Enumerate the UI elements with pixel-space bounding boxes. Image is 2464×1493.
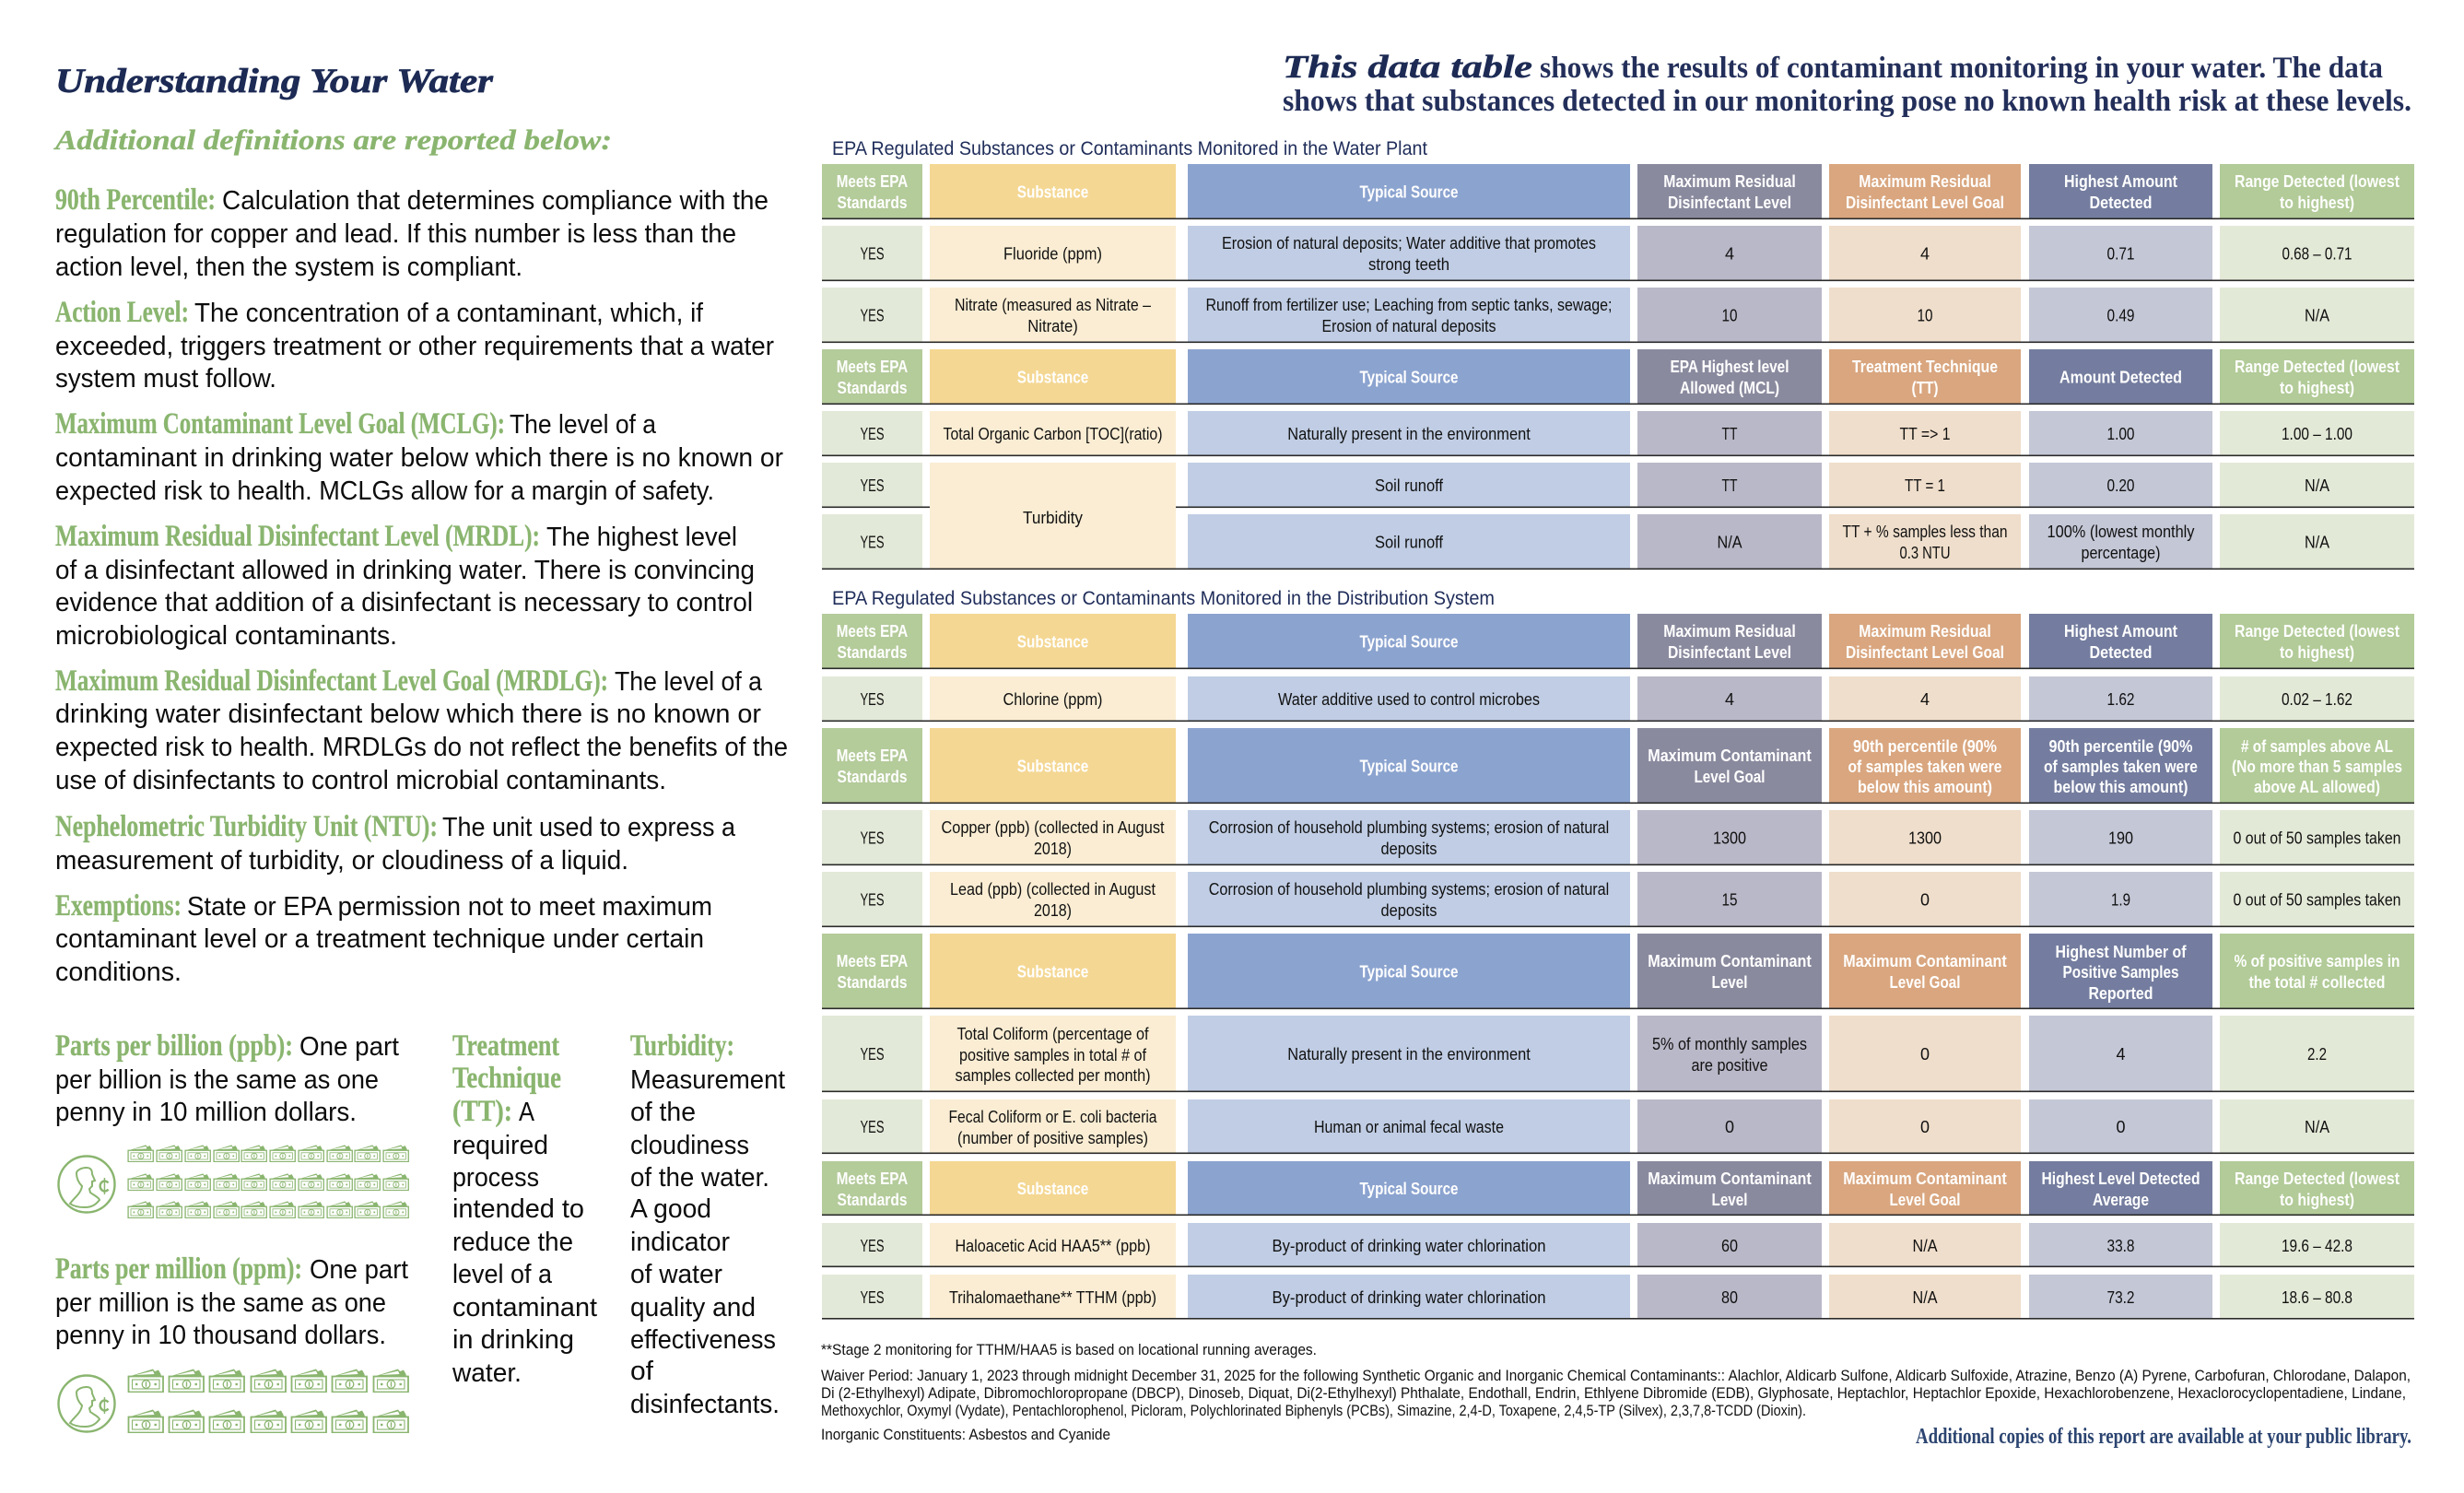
definition: Turbidity: of the: [630, 1098, 696, 1127]
header row: residual disinfectant: to highest): [2280, 194, 2354, 212]
header row: coliform: Level: [1712, 973, 1747, 992]
definition: Turbidity: effectiveness: [630, 1325, 776, 1355]
row: haloacetic acid: 33.8: [2106, 1237, 2134, 1255]
header row: 90th percentile: 90th percentile (90%: [1853, 737, 1997, 756]
row: nitrate: 10: [1721, 306, 1738, 324]
row: chlorine: 4: [1920, 690, 1930, 709]
header row: treatment technique: (TT): [1911, 379, 1939, 397]
definition: NTU: The unit used to express a: [442, 813, 735, 842]
icon: rows of dollar bills (ppb): [127, 1145, 408, 1218]
definition: Treatment Technique: Technique: [452, 1062, 561, 1095]
row: haloacetic acid: YES: [861, 1237, 885, 1255]
row: fluoride: 4: [1920, 245, 1930, 264]
row: turbidity (two rows with merged substance cell): TT: [1721, 476, 1738, 495]
definition: MCLG: Maximum Contaminant Level Goal (MCLG):: [55, 407, 505, 441]
header row: disinfection by-products: Level: [1712, 1191, 1747, 1209]
row: chlorine: Water additive used to control microbes: [1278, 690, 1540, 709]
row: turbidity (two rows with merged substance cell): Soil runoff: [1375, 533, 1444, 551]
header row: disinfection by-products: Maximum Contaminant: [1843, 1170, 2007, 1188]
definition: MRDLG: The level of a: [615, 667, 762, 697]
row: total coliform: are positive: [1692, 1056, 1767, 1075]
definition: Exemptions: Exemptions:: [55, 889, 182, 923]
row: nitrate: YES: [861, 306, 885, 324]
row: fecal coliform: [822, 1099, 2414, 1154]
definition: MCLG: The level of a: [510, 410, 656, 440]
header row: coliform: Level Goal: [1889, 973, 1961, 992]
definition: NTU: [55, 810, 735, 876]
row: turbidity (two rows with merged substance cell): percentage): [2081, 544, 2160, 562]
definition: 90th Percentile: [55, 183, 769, 282]
header row: residual disinfectant: Range Detected (lowest: [2235, 622, 2399, 641]
definition: Parts per million: penny in 10 thousand dollars.: [55, 1321, 386, 1350]
row: total organic carbon: [822, 411, 2414, 456]
heading: this data table intro: shows that substances detected in our monitoring pose no known health risk at these levels.: [1283, 85, 2411, 118]
header row: 90th percentile: Standards: [837, 768, 907, 786]
section heading: water plant: EPA Regulated Substances or Contaminants Monitored in the Water Plant: [832, 138, 1427, 159]
row: copper: 2018): [1034, 840, 1072, 858]
row: total organic carbon: YES: [861, 425, 885, 443]
row: nitrate: 10: [1917, 306, 1933, 324]
definition: Parts per billion: per billion is the same as one: [55, 1065, 379, 1095]
header row: residual disinfectant: Detected: [2090, 194, 2153, 212]
row: fluoride: 0.71: [2106, 245, 2134, 264]
row: trihalomethane: YES: [861, 1288, 885, 1307]
definition: Treatment Technique: level of a: [452, 1260, 552, 1289]
header row: residual disinfectant: Standards: [837, 194, 907, 212]
header row: disinfection by-products: Typical Source: [1360, 1180, 1458, 1198]
icon: penny coin (ppb): [59, 1156, 114, 1213]
definition: Treatment Technique: intended to: [452, 1194, 584, 1224]
header row: residual disinfectant: Detected: [2090, 643, 2153, 662]
icon: rows of dollar bills (ppm): [127, 1370, 408, 1432]
title: Understanding Your Water: [55, 63, 494, 100]
heading: this data table intro: [1283, 49, 2411, 118]
definition: Treatment Technique: required: [452, 1131, 548, 1160]
header row: disinfection by-products: to highest): [2280, 1191, 2354, 1209]
header row: coliform: Highest Number of: [2055, 943, 2187, 961]
row: fecal coliform: YES: [861, 1118, 885, 1136]
definition: Treatment Technique: A: [519, 1098, 534, 1127]
definition: Treatment Technique: [452, 1029, 597, 1388]
row: total coliform: samples collected per month): [955, 1066, 1150, 1085]
definition: Parts per million: [55, 1252, 408, 1350]
header row: treatment technique: Meets EPA: [837, 358, 908, 376]
definition: Turbidity: quality and: [630, 1293, 756, 1323]
header row: 90th percentile: below this amount): [1858, 778, 1992, 796]
header row: disinfection by-products: Maximum Contaminant: [1648, 1170, 1812, 1188]
definition: Treatment Technique: (TT):: [452, 1095, 512, 1128]
row: nitrate: N/A: [2305, 306, 2329, 324]
row: trihalomethane: [822, 1275, 2414, 1320]
icon: penny coin (ppm): [59, 1375, 114, 1432]
header row: 90th percentile: of samples taken were: [2044, 758, 2198, 776]
definition: Turbidity: indicator: [630, 1228, 730, 1257]
definition: Exemptions: [55, 889, 712, 987]
row: fecal coliform: Fecal Coliform or E. coli bacteria: [949, 1108, 1157, 1126]
definition: Parts per billion: Parts per billion (ppb):: [55, 1029, 293, 1063]
definition: Treatment Technique: reduce the: [452, 1228, 573, 1257]
row: fluoride: 4: [1725, 245, 1734, 264]
row: total coliform: 5% of monthly samples: [1652, 1035, 1807, 1053]
row: turbidity (two rows with merged substance cell): YES: [861, 533, 885, 551]
header row: coliform: Positive Samples: [2062, 963, 2178, 982]
row: fluoride: 0.68 – 0.71: [2282, 245, 2352, 264]
definition: Parts per billion: penny in 10 million dollars.: [55, 1098, 357, 1127]
header row: coliform: [822, 934, 2414, 1009]
row: haloacetic acid: 19.6 – 42.8: [2282, 1237, 2353, 1255]
row: lead: 15: [1721, 890, 1738, 909]
row: chlorine: 0.02 – 1.62: [2282, 690, 2353, 709]
definition: Parts per million: Parts per million (ppm):: [55, 1252, 302, 1286]
row: turbidity (two rows with merged substance cell): 100% (lowest monthly: [2047, 523, 2195, 541]
definition: MRDL: Maximum Residual Disinfectant Level (MRDL):: [55, 520, 540, 553]
definition: 90th Percentile: action level, then the system is compliant.: [55, 253, 522, 282]
header row: residual disinfectant: Meets EPA: [837, 622, 908, 641]
definition: MRDLG: use of disinfectants to control microbial contaminants.: [55, 766, 666, 795]
row: trihalomethane: 18.6 – 80.8: [2282, 1288, 2353, 1307]
header row: residual disinfectant: Meets EPA: [837, 172, 908, 191]
row: haloacetic acid: [822, 1223, 2414, 1267]
row: nitrate: Erosion of natural deposits: [1321, 317, 1496, 335]
row: trihalomethane: 73.2: [2106, 1288, 2134, 1307]
header row: treatment technique: [822, 349, 2414, 405]
definition: MRDL: of a disinfectant allowed in drinking water. There is convincing: [55, 556, 755, 585]
header row: coliform: Meets EPA: [837, 952, 908, 970]
row: fecal coliform: 0: [1920, 1118, 1930, 1136]
header row: treatment technique: Treatment Technique: [1852, 358, 1998, 376]
definition: Treatment Technique: water.: [452, 1358, 522, 1388]
row: turbidity (two rows with merged substance cell): 0.20: [2106, 476, 2134, 495]
header row: 90th percentile: of samples taken were: [1848, 758, 2001, 776]
header row: residual disinfectant: Maximum Residual: [1663, 622, 1796, 641]
definition: Parts per million: per million is the same as one: [55, 1288, 386, 1318]
footnote: waiver period: Methoxychlor, Oxymyl (Vydate), Pentachlorophenol, Picloram, Polychlorinated Biphenyls (PCBs), Simazine, 2,4-D, Toxapene, 2,4,5-TP (Silvex), 2,3,7,8-TCDD (Dioxin).: [821, 1403, 1806, 1419]
row: chlorine: 4: [1725, 690, 1734, 709]
row: total coliform: 0: [1920, 1045, 1930, 1064]
row: trihalomethane: By-product of drinking water chlorination: [1272, 1288, 1546, 1307]
header row: residual disinfectant: Maximum Residual: [1663, 172, 1796, 191]
header row: treatment technique: EPA Highest level: [1670, 358, 1789, 376]
header row: disinfection by-products: Range Detected (lowest: [2235, 1170, 2399, 1188]
row: lead: deposits: [1380, 901, 1437, 920]
footnote: waiver period: [821, 1368, 2411, 1419]
header row: coliform: the total # collected: [2248, 973, 2385, 992]
row: lead: 0 out of 50 samples taken: [2234, 890, 2401, 909]
definition: Exemptions: State or EPA permission not to meet maximum: [187, 892, 712, 922]
header row: 90th percentile: 90th percentile (90%: [2049, 737, 2193, 756]
row: total organic carbon: TT: [1721, 425, 1738, 443]
header row: 90th percentile: below this amount): [2053, 778, 2188, 796]
definition: MRDLG: [55, 664, 788, 795]
header row: 90th percentile: Substance: [1017, 758, 1088, 776]
header row: 90th percentile: [822, 728, 2414, 804]
row: total organic carbon: 1.00: [2106, 425, 2134, 443]
definition: Action Level: system must follow.: [55, 364, 276, 394]
definition: Treatment Technique: process: [452, 1163, 539, 1193]
header row: coliform: Substance: [1017, 962, 1088, 981]
header row: disinfection by-products: Highest Level Detected: [2042, 1170, 2200, 1188]
header row: residual disinfectant: Typical Source: [1360, 182, 1458, 201]
header row: coliform: Reported: [2088, 984, 2153, 1003]
row: copper: YES: [861, 829, 885, 848]
header row: residual disinfectant: Standards: [837, 643, 907, 662]
definition: MCLG: expected risk to health. MCLGs allow for a margin of safety.: [55, 476, 714, 506]
header row: 90th percentile: # of samples above AL: [2241, 737, 2393, 756]
header row: residual disinfectant: Substance: [1017, 632, 1088, 651]
definition: Turbidity: cloudiness: [630, 1131, 749, 1160]
header row: disinfection by-products: Standards: [837, 1191, 907, 1209]
row: lead: [822, 872, 2414, 927]
footnote: stage 2 monitoring: **Stage 2 monitoring for TTHM/HAA5 is based on locational running averages.: [821, 1342, 1317, 1358]
row: nitrate: [822, 288, 2414, 343]
definition: MRDL: evidence that addition of a disinfectant is necessary to control: [55, 588, 753, 617]
definition: Parts per billion: [55, 1029, 399, 1127]
section heading: distribution system: EPA Regulated Substances or Contaminants Monitored in the Distribution System: [832, 588, 1495, 609]
row: turbidity (two rows with merged substance cell): N/A: [1718, 533, 1742, 551]
definition: Turbidity: A good: [630, 1194, 711, 1224]
row: fluoride: Fluoride (ppm): [1003, 245, 1102, 264]
row: copper: 190: [2108, 829, 2133, 848]
panel: definitions: [53, 63, 788, 1432]
row: nitrate: Runoff from fertilizer use; Leaching from septic tanks, sewage;: [1205, 296, 1613, 314]
header row: residual disinfectant: [822, 614, 2414, 669]
definition: Action Level: The concentration of a contaminant, which, if: [194, 299, 703, 328]
header row: disinfection by-products: Meets EPA: [837, 1170, 908, 1188]
row: total coliform: 4: [2116, 1045, 2126, 1064]
row: total organic carbon: Total Organic Carbon [TOC](ratio): [944, 425, 1163, 443]
row: nitrate: 0.49: [2106, 306, 2134, 324]
row: haloacetic acid: 60: [1721, 1237, 1738, 1255]
definition: MRDL: The highest level: [546, 523, 737, 552]
row: trihalomethane: Trihalomaethane** TTHM (ppb): [949, 1288, 1156, 1307]
header row: treatment technique: Substance: [1017, 369, 1088, 387]
header row: residual disinfectant: Disinfectant Level: [1668, 194, 1791, 212]
definition: MCLG: contaminant in drinking water below which there is no known or: [55, 443, 783, 473]
definition: NTU: measurement of turbidity, or cloudiness of a liquid.: [55, 846, 628, 876]
header row: coliform: % of positive samples in: [2234, 952, 2399, 970]
header row: coliform: Standards: [837, 973, 907, 992]
row: turbidity (two rows with merged substance cell): Turbidity: [1023, 509, 1083, 527]
row: fluoride: YES: [861, 245, 885, 264]
header row: treatment technique: Amount Detected: [2059, 369, 2182, 387]
header row: residual disinfectant: Highest Amount: [2064, 622, 2177, 641]
definition: Turbidity: [630, 1029, 785, 1419]
row: fluoride: [822, 226, 2414, 281]
definition: Turbidity: Turbidity:: [630, 1029, 734, 1063]
row: turbidity (two rows with merged substance cell): N/A: [2305, 533, 2329, 551]
row: copper: 0 out of 50 samples taken: [2234, 829, 2401, 848]
row: lead: 0: [1920, 890, 1930, 909]
row: total coliform: Total Coliform (percentage of: [956, 1025, 1149, 1043]
definition: Turbidity: Measurement: [630, 1065, 785, 1095]
footnote: inorganic constituents: Inorganic Constituents: Asbestos and Cyanide: [821, 1427, 1110, 1443]
definition: Action Level: [55, 296, 774, 394]
row: haloacetic acid: By-product of drinking water chlorination: [1272, 1237, 1546, 1255]
definition: MRDLG: expected risk to health. MRDLGs do not reflect the benefits of the: [55, 733, 788, 762]
header row: 90th percentile: (No more than 5 samples: [2232, 758, 2402, 776]
header row: coliform: Maximum Contaminant: [1648, 952, 1812, 970]
row: trihalomethane: 80: [1721, 1288, 1738, 1307]
header row: residual disinfectant: Maximum Residual: [1859, 622, 1991, 641]
row: lead: Lead (ppb) (collected in August: [950, 880, 1156, 899]
header row: 90th percentile: above AL allowed): [2254, 778, 2380, 796]
definition: MRDL: microbiological contaminants.: [55, 621, 397, 651]
row: turbidity (two rows with merged substance cell): YES: [861, 476, 885, 495]
header row: disinfection by-products: [822, 1161, 2414, 1216]
header row: residual disinfectant: Typical Source: [1360, 632, 1458, 651]
row: total coliform: 2.2: [2307, 1045, 2327, 1064]
header row: disinfection by-products: Substance: [1017, 1180, 1088, 1198]
definition: MRDLG: drinking water disinfectant below which there is no known or: [55, 699, 762, 729]
row: turbidity (two rows with merged substance cell): 0.3 NTU: [1900, 544, 1950, 562]
row: copper: 1300: [1713, 829, 1746, 848]
definition: MCLG: [55, 407, 783, 506]
header row: 90th percentile: Level Goal: [1694, 768, 1766, 786]
header row: disinfection by-products: Average: [2093, 1191, 2149, 1209]
header row: residual disinfectant: to highest): [2280, 643, 2354, 662]
row: turbidity (two rows with merged substance cell): [822, 463, 2414, 570]
header row: treatment technique: Typical Source: [1360, 369, 1458, 387]
definition: Treatment Technique: in drinking: [452, 1325, 574, 1355]
header row: residual disinfectant: Disinfectant Level Goal: [1846, 643, 2004, 662]
header row: 90th percentile: Typical Source: [1360, 758, 1458, 776]
row: fecal coliform: N/A: [2305, 1118, 2329, 1136]
row: total coliform: Naturally present in the environment: [1287, 1045, 1531, 1064]
header row: residual disinfectant: Maximum Residual: [1859, 172, 1991, 191]
header row: residual disinfectant: Disinfectant Level Goal: [1846, 194, 2004, 212]
row: fecal coliform: (number of positive samples): [957, 1129, 1148, 1147]
header row: 90th percentile: Meets EPA: [837, 746, 908, 765]
definition: Treatment Technique: Treatment: [452, 1029, 559, 1063]
definition: Turbidity: of: [630, 1357, 653, 1386]
definition: Treatment Technique: contaminant: [452, 1293, 597, 1323]
row: total organic carbon: TT => 1: [1900, 425, 1950, 443]
header row: treatment technique: Allowed (MCL): [1680, 379, 1779, 397]
row: fecal coliform: 0: [1725, 1118, 1734, 1136]
header row: coliform: Typical Source: [1360, 962, 1458, 981]
header row: coliform: Maximum Contaminant: [1843, 952, 2007, 970]
definition: Parts per million: One part: [310, 1255, 408, 1285]
definition: 90th Percentile: Calculation that determines compliance with the: [222, 186, 769, 216]
definition: Exemptions: contaminant level or a treatment technique under certain: [55, 924, 704, 954]
definition: Action Level: Action Level:: [55, 296, 189, 329]
header row: treatment technique: Standards: [837, 379, 907, 397]
row: nitrate: Nitrate): [1027, 317, 1078, 335]
row: copper: Corrosion of household plumbing systems; erosion of natural: [1209, 818, 1609, 837]
subtitle: Additional definitions are reported below:: [53, 123, 612, 156]
row: chlorine: Chlorine (ppm): [1003, 690, 1102, 709]
header row: residual disinfectant: Highest Amount: [2064, 172, 2177, 191]
row: trihalomethane: N/A: [1913, 1288, 1937, 1307]
row: fecal coliform: Human or animal fecal waste: [1314, 1118, 1504, 1136]
table: water plant: [822, 164, 2414, 570]
row: total organic carbon: Naturally present in the environment: [1287, 425, 1531, 443]
row: copper: [822, 810, 2414, 865]
header row: residual disinfectant: [822, 164, 2414, 219]
definition: MRDLG: Maximum Residual Disinfectant Level Goal (MRDLG):: [55, 664, 608, 698]
row: total coliform: [822, 1016, 2414, 1092]
definition: Parts per billion: One part: [299, 1032, 399, 1062]
row: lead: YES: [861, 890, 885, 909]
header row: treatment technique: Range Detected (lowest: [2235, 358, 2399, 376]
definition: NTU: Nephelometric Turbidity Unit (NTU):: [55, 810, 438, 843]
header row: 90th percentile: Maximum Contaminant: [1648, 746, 1812, 765]
definition: Turbidity: of water: [630, 1260, 722, 1289]
definition: Action Level: exceeded, triggers treatment or other requirements that a water: [55, 332, 774, 361]
row: total organic carbon: 1.00 – 1.00: [2282, 425, 2353, 443]
row: lead: 2018): [1034, 901, 1072, 920]
row: lead: Corrosion of household plumbing systems; erosion of natural: [1209, 880, 1609, 899]
row: chlorine: YES: [861, 690, 885, 709]
row: haloacetic acid: Haloacetic Acid HAA5** (ppb): [955, 1237, 1150, 1255]
heading: this data table intro: This data table: [1283, 49, 1532, 85]
header row: residual disinfectant: Disinfectant Level: [1668, 643, 1791, 662]
row: chlorine: 1.62: [2106, 690, 2134, 709]
row: copper: 1300: [1908, 829, 1942, 848]
row: fluoride: Erosion of natural deposits; Water additive that promotes: [1222, 234, 1596, 253]
definition: 90th Percentile: regulation for copper and lead. If this number is less than the: [55, 219, 736, 249]
row: lead: 1.9: [2111, 890, 2130, 909]
row: turbidity (two rows with merged substance cell): N/A: [2305, 476, 2329, 495]
header row: treatment technique: to highest): [2280, 379, 2354, 397]
heading: this data table intro: shows the results of contaminant monitoring in your water. The data: [1540, 52, 2383, 85]
definition: 90th Percentile: 90th Percentile:: [55, 183, 216, 217]
header row: disinfection by-products: Level Goal: [1889, 1191, 1961, 1209]
row: copper: Copper (ppb) (collected in August: [942, 818, 1165, 837]
row: total coliform: positive samples in total # of: [959, 1046, 1147, 1064]
row: chlorine: [822, 676, 2414, 722]
row: nitrate: Nitrate (measured as Nitrate –: [955, 296, 1151, 314]
row: total coliform: YES: [861, 1045, 885, 1064]
row: turbidity (two rows with merged substance cell): TT + % samples less than: [1843, 523, 2007, 541]
table: distribution system: [822, 614, 2414, 1320]
definition: Turbidity: of the water.: [630, 1163, 769, 1193]
definition: MRDL: [55, 520, 755, 651]
row: copper: deposits: [1380, 840, 1437, 858]
header row: residual disinfectant: Substance: [1017, 182, 1088, 201]
row: turbidity (two rows with merged substance cell): TT = 1: [1905, 476, 1945, 495]
definition: Turbidity: disinfectants.: [630, 1390, 780, 1419]
header row: residual disinfectant: Range Detected (lowest: [2235, 172, 2399, 191]
definition: Exemptions: conditions.: [55, 958, 182, 987]
row: fluoride: strong teeth: [1368, 255, 1449, 274]
row: haloacetic acid: N/A: [1913, 1237, 1937, 1255]
row: fecal coliform: 0: [2116, 1118, 2126, 1136]
row: turbidity (two rows with merged substance cell): Soil runoff: [1375, 476, 1444, 495]
